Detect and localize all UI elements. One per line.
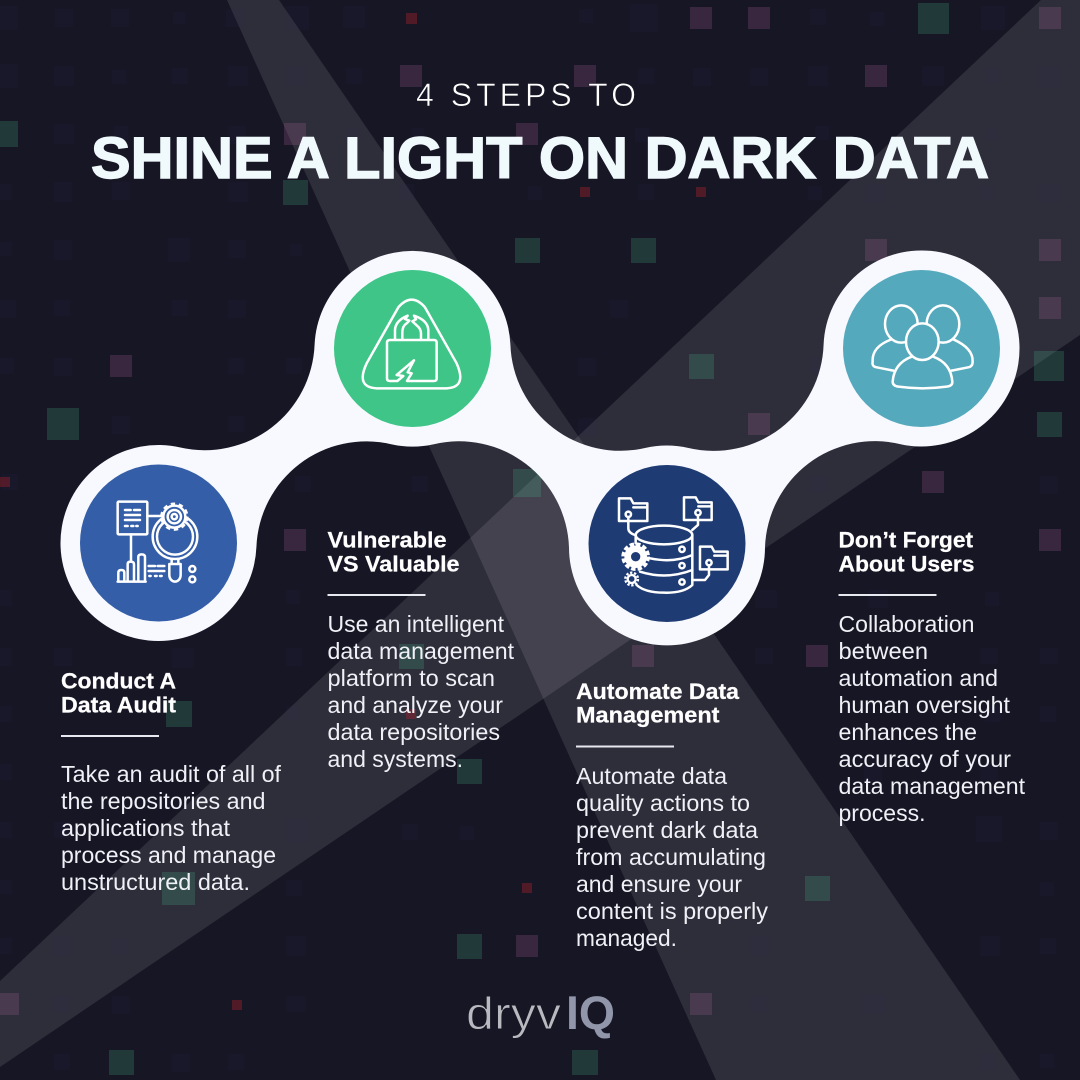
step 2 text block — [328, 528, 515, 772]
step 3 text block — [576, 679, 769, 951]
step 4 body — [838, 611, 1026, 826]
step 4 body: data management — [838, 773, 1026, 799]
step 3 body — [576, 763, 769, 951]
dryvIQ logo: IQ — [566, 986, 615, 1039]
step 3 body: prevent dark data — [576, 817, 758, 843]
step 1 body: applications that — [61, 815, 231, 841]
eyebrow heading: 4 STEPS TO — [416, 77, 636, 113]
main title: SHINE A LIGHT ON DARK DATA — [91, 126, 989, 191]
step 4 heading — [838, 528, 974, 576]
step 1 body: Take an audit of all of — [61, 761, 282, 787]
step 3 body: and ensure your — [576, 871, 742, 897]
winding white ribbon connecting the four steps — [60, 250, 1020, 645]
step 2 body — [328, 611, 515, 772]
step 1 text block — [61, 668, 282, 895]
step 1 body — [61, 761, 282, 895]
step 3 heading: Automate Data — [576, 679, 740, 704]
step 4 heading: About Users — [838, 552, 974, 576]
step 1 body: process and manage — [61, 842, 276, 868]
step 4 teal circle with users icon — [843, 270, 1000, 427]
icon: broken padlock in warning triangle — [363, 300, 460, 388]
step 1 heading — [61, 668, 177, 718]
light beam descending from top left — [227, 0, 1020, 1080]
step 4 body: accuracy of your — [838, 746, 1011, 772]
step 4 body: Collaboration — [838, 611, 974, 637]
step 2 body: Use an intelligent — [328, 611, 505, 637]
icon: group of users — [872, 305, 973, 388]
step 3 body: Automate data — [576, 763, 727, 789]
step 3 body: quality actions to — [576, 790, 750, 816]
step 4 body: human oversight — [838, 692, 1011, 718]
step 2 green circle with broken lock icon — [334, 270, 491, 427]
icon: database with folders and gears — [619, 497, 728, 593]
step 2 body: and systems. — [328, 746, 463, 772]
step 1 heading: Conduct A — [61, 668, 176, 694]
step 3 body: from accumulating — [576, 844, 766, 870]
step 3 body: content is properly — [576, 898, 769, 924]
icon: data audit — [118, 502, 197, 582]
step 4 body: between — [838, 638, 928, 664]
step 4 body: process. — [838, 800, 926, 826]
dryvIQ logo — [466, 986, 615, 1039]
step 2 body: data management — [328, 638, 515, 664]
step 2 body: and analyze your — [328, 692, 503, 718]
step 3 navy circle with database icon — [588, 465, 746, 622]
step 4 body: enhances the — [838, 719, 977, 745]
step 4 body: automation and — [838, 665, 998, 691]
step 3 body: managed. — [576, 925, 677, 951]
step 3 heading — [576, 679, 740, 728]
step 2 body: data repositories — [328, 719, 500, 745]
step 1 blue circle with audit icon — [80, 464, 237, 622]
step 2 heading — [328, 528, 460, 576]
step 1 heading: Data Audit — [61, 692, 177, 718]
step 2 heading: Vulnerable — [328, 528, 446, 552]
dryvIQ logo: dryv — [466, 988, 562, 1039]
step 1 body: the repositories and — [61, 788, 266, 814]
step 2 heading: VS Valuable — [328, 552, 460, 576]
step 2 body: platform to scan — [328, 665, 495, 691]
step 4 text block — [838, 528, 1026, 826]
step 4 heading: Don’t Forget — [838, 528, 974, 552]
step 1 body: unstructured data. — [61, 869, 250, 895]
step 3 heading: Management — [576, 702, 720, 728]
